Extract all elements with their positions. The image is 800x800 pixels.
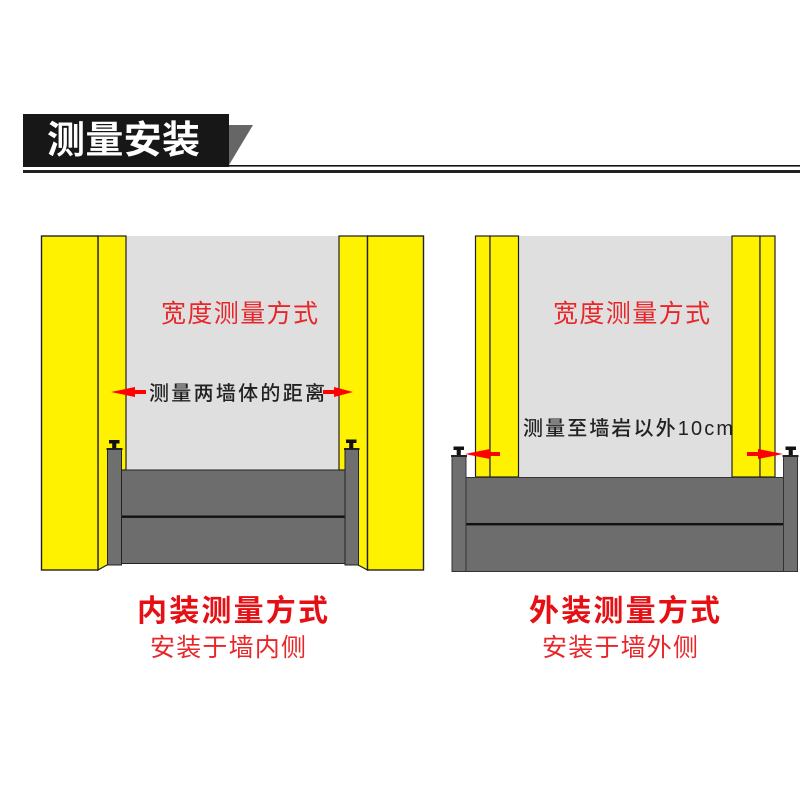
sub-caption: outside: 安装于墙外侧	[542, 634, 698, 662]
caption: outside installation	[529, 595, 720, 662]
flood barrier panels	[121, 470, 345, 564]
left wall	[42, 236, 126, 570]
right wall	[339, 236, 424, 570]
left post	[106, 440, 122, 565]
flood barrier panels	[466, 478, 784, 572]
caption: inside installation	[137, 595, 328, 662]
caption: outside installation: 外装测量方式	[529, 595, 720, 628]
gray opening, inside	[126, 236, 339, 472]
right post	[344, 440, 360, 565]
title banner	[23, 114, 800, 173]
right wall	[732, 236, 775, 477]
arrow: left	[465, 449, 500, 459]
left wall	[476, 236, 518, 477]
sub-caption: inside: 安装于墙内侧	[150, 634, 306, 662]
heading: width measuring method: 宽度测量方式	[553, 300, 710, 328]
panel: inside-wall installation diagram	[42, 236, 424, 570]
right post	[782, 446, 798, 572]
gray opening, outside	[518, 236, 732, 478]
label: measure to outside of wall + 10cm: 测量至墙岩以外10cm	[523, 417, 733, 440]
arrow: right	[747, 449, 783, 459]
arrow: left	[111, 387, 146, 397]
label: measure distance between walls: 测量两墙体的距离	[149, 382, 325, 405]
left post	[451, 446, 467, 572]
title text: 测量安装	[47, 120, 200, 162]
heading: width measuring method: 宽度测量方式	[161, 300, 318, 328]
panel: outside-wall installation diagram	[451, 236, 798, 572]
caption: inside installation: 内装测量方式	[137, 595, 328, 628]
arrow: right	[323, 387, 353, 397]
